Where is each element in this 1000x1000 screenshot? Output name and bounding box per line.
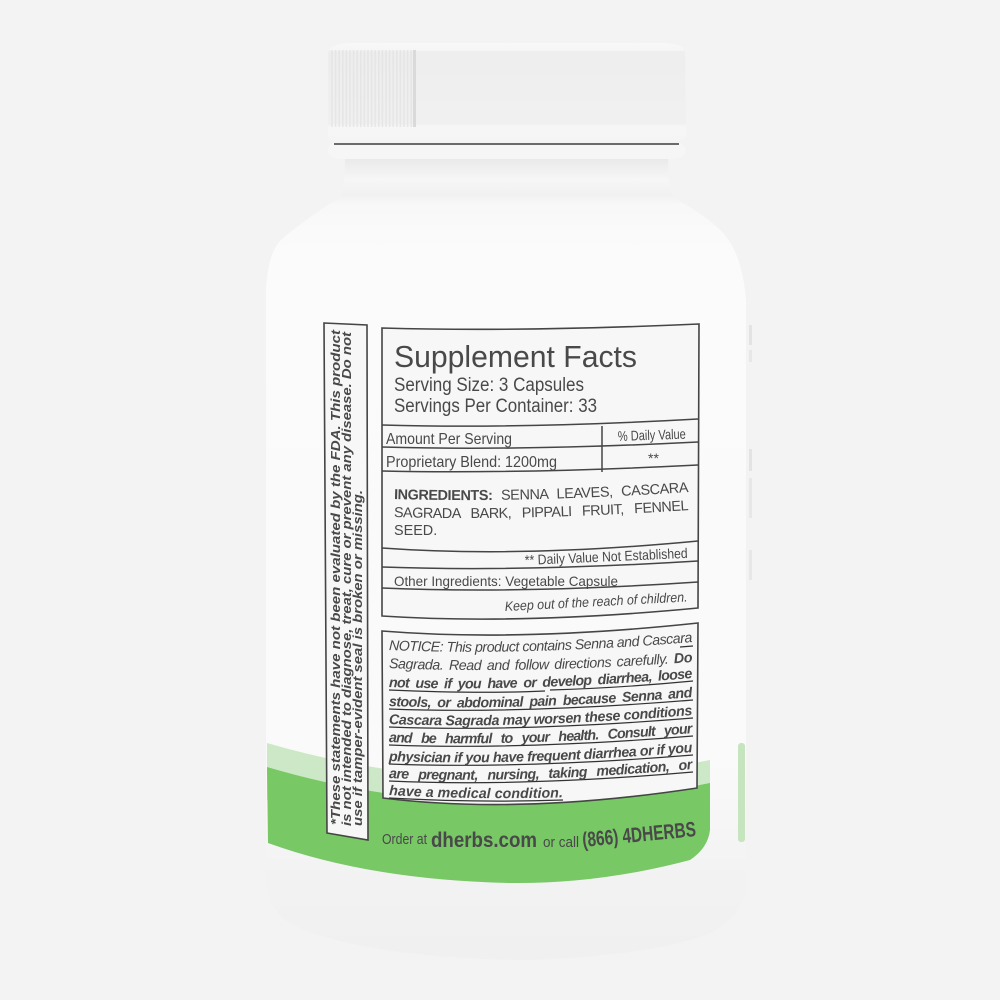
notice text: are pregnant, nursing, taking medication, or <box>389 761 693 782</box>
notice text: physician if you have frequent diarrhea or if you <box>388 744 692 766</box>
ingredients: SEED. <box>394 523 437 539</box>
ingredients: SAGRADA BARK, PIPPALI FRUIT, FENNEL <box>394 500 688 520</box>
amount per serving: Amount Per Serving <box>386 431 512 448</box>
cap <box>328 43 686 141</box>
bottle body <box>266 158 746 960</box>
panel: supplement facts <box>381 323 700 620</box>
keep out of reach: Keep out of the reach of children. <box>504 589 688 614</box>
order line <box>382 818 697 852</box>
underlines <box>389 646 693 801</box>
proprietary blend: Proprietary Blend: 1200mg <box>386 454 557 471</box>
notice text: stools, or abdominal pain because Senna and <box>389 686 692 710</box>
notice text: and be harmful to your health. Consult your <box>389 726 693 746</box>
neck ring <box>328 143 686 159</box>
panel: notice <box>381 622 699 806</box>
notice text: have a medical condition. <box>389 784 562 798</box>
label green band <box>267 767 710 883</box>
order line: (866) 4DHERBS <box>581 818 697 852</box>
label content <box>323 322 700 852</box>
right side label sliver <box>738 325 752 842</box>
notice text <box>388 634 693 798</box>
ingredients <box>394 482 689 539</box>
label green band light <box>267 743 710 800</box>
bottle <box>266 43 752 960</box>
disclaimer line 2: is not intended to diagnose, treat, cure or prevent any disease. Do not <box>339 331 354 826</box>
other ingredients: Other Ingredients: Vegetable Capsule <box>394 573 618 589</box>
disclaimer line 3: use if tamper-evident seal is broken or missing. <box>350 490 365 826</box>
order line: dherbs.com <box>431 828 537 852</box>
order line: or call <box>543 834 579 851</box>
notice text: Cascara Sagrada may worsen these conditions <box>390 706 692 728</box>
ingredients: INGREDIENTS: SENNA LEAVES, CASCARA <box>394 482 689 500</box>
notice text: Sagrada. Read and follow directions carefully. Do <box>389 653 692 672</box>
serving size: Serving Size: 3 Capsules <box>394 375 584 396</box>
daily value note: ** Daily Value Not Established <box>524 545 688 568</box>
panel: FDA disclaimer <box>324 323 368 840</box>
order line: Order at <box>382 831 428 848</box>
daily value header: % Daily Value <box>618 426 686 444</box>
notice text: not use if you have or develop diarrhea, loose <box>389 670 692 692</box>
servings per container: Servings Per Container: 33 <box>394 396 597 417</box>
notice text: NOTICE: This product contains Senna and Cascara <box>389 634 692 655</box>
heading: Supplement Facts <box>394 339 637 374</box>
disclaimer line 1: *These statements have not been evaluated by the FDA. This product <box>328 329 343 825</box>
daily value asterisks: ** <box>648 450 659 466</box>
